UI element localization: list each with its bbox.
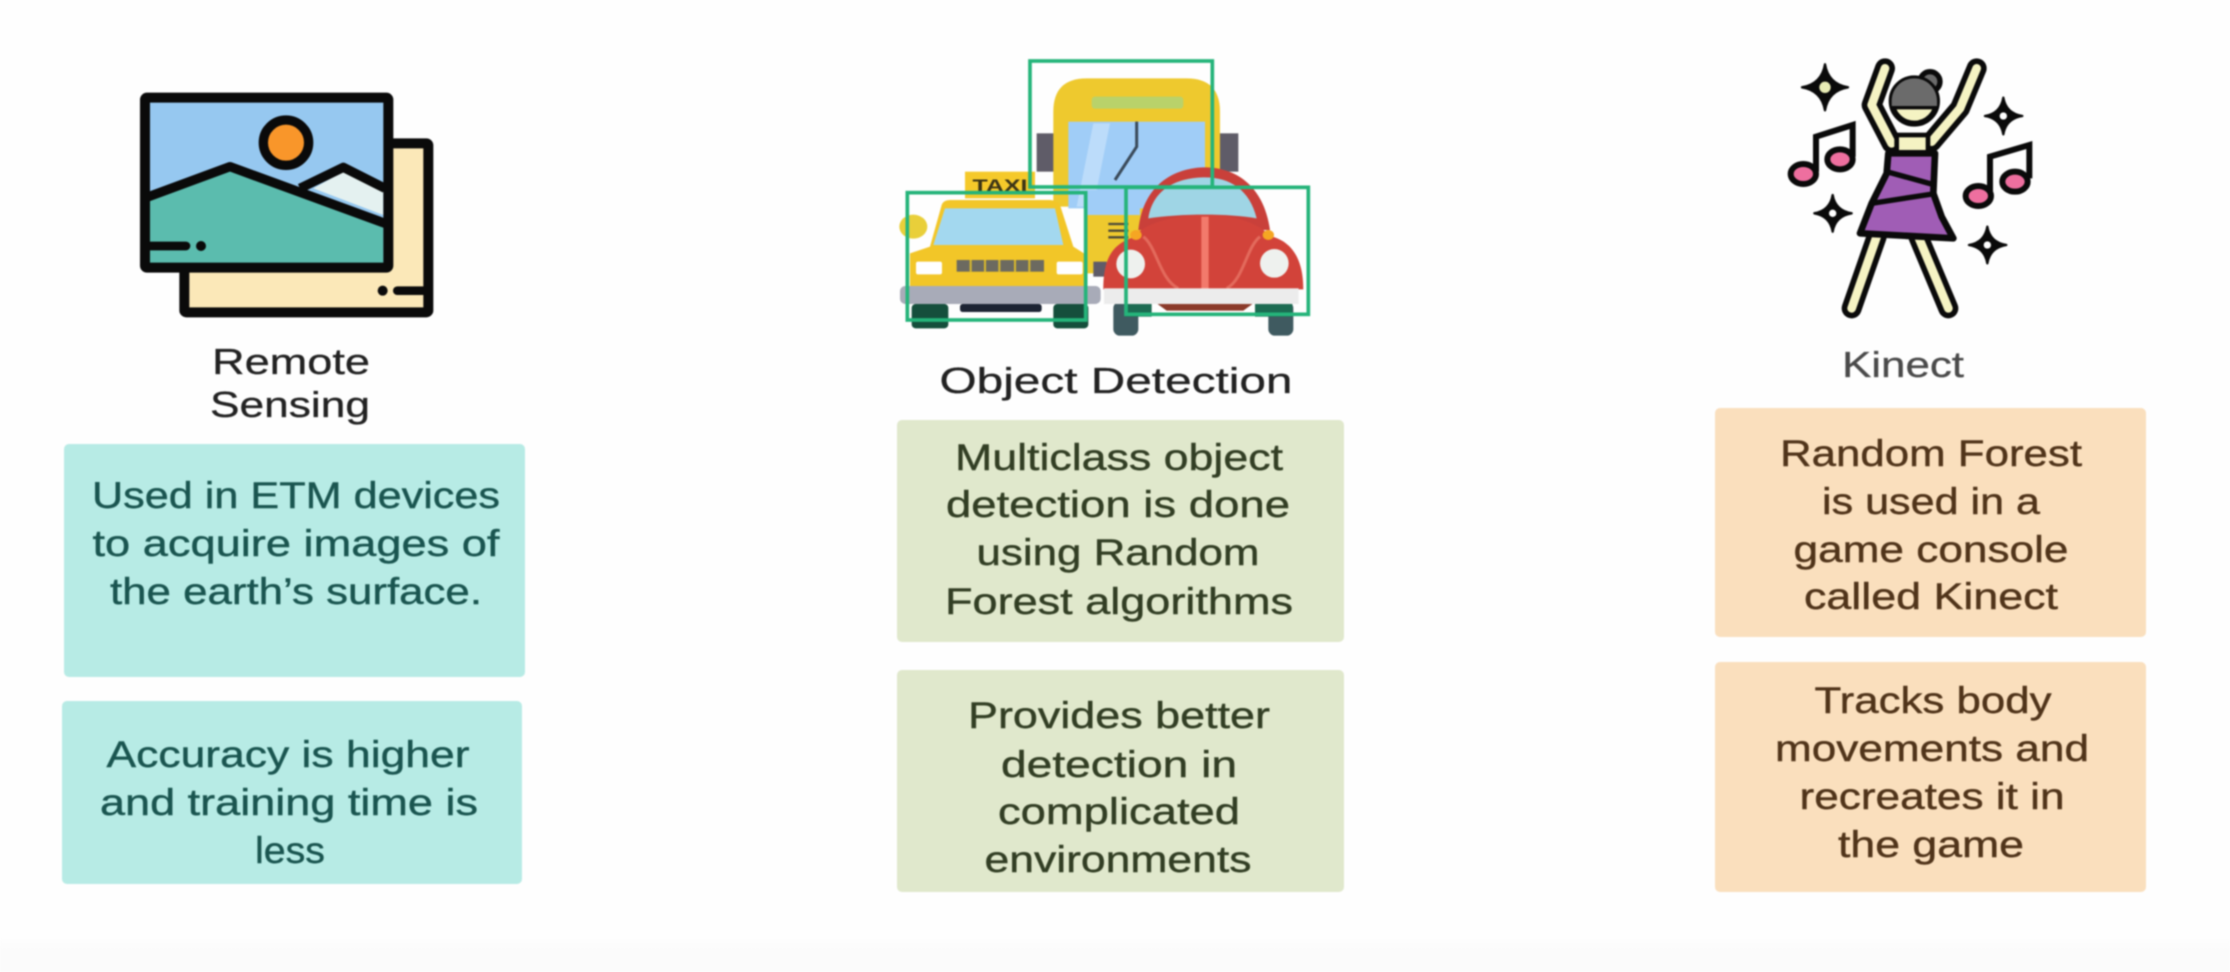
text box: better detection: [897, 670, 1344, 892]
text box: game console: called Kinect: [1804, 576, 2059, 617]
text box: body tracking: [1715, 662, 2146, 892]
text box: better detection: Provides better: [968, 695, 1270, 736]
text box: multiclass detection: detection is done: [946, 484, 1290, 525]
panel: kinect: [1715, 64, 2146, 892]
text box: better detection: complicated: [998, 791, 1240, 832]
text box: body tracking: Tracks body: [1814, 680, 2052, 721]
text box: ETM devices: [64, 444, 525, 677]
text box: multiclass detection: using Random: [976, 532, 1260, 573]
heading: Remote Sensing: Sensing: [210, 384, 370, 425]
panel: remote sensing: [62, 98, 525, 884]
text box: multiclass detection: Forest algorithms: [945, 581, 1293, 622]
text box: game console: game console: [1794, 529, 2068, 570]
text box: body tracking: movements and: [1775, 728, 2089, 769]
text box: ETM devices: to acquire images of: [92, 523, 500, 564]
text box: body tracking: the game: [1838, 824, 2024, 865]
text box: accuracy: and training time is: [100, 782, 478, 823]
text box: better detection: environments: [984, 839, 1252, 880]
icon: stacked landscape photos: [145, 98, 428, 312]
text box: body tracking: recreates it in: [1800, 776, 2064, 817]
text box: ETM devices: Used in ETM devices: [92, 475, 500, 516]
text box: ETM devices: the earth’s surface.: [110, 571, 482, 612]
icon: red beetle car: [1103, 167, 1303, 336]
text box: accuracy: less: [255, 830, 325, 871]
text box: multiclass detection: [897, 420, 1344, 642]
text box: better detection: detection in: [1001, 744, 1237, 785]
text box: accuracy: [62, 701, 522, 884]
text box: game console: [1715, 408, 2146, 637]
heading: Remote Sensing: [210, 341, 370, 425]
icon: vehicles with detection boxes: [899, 61, 1308, 336]
heading: Remote Sensing: Remote: [212, 341, 370, 382]
detection boxes: [907, 61, 1308, 320]
text box: multiclass detection: Multiclass object: [955, 437, 1284, 478]
panel: object detection: [897, 61, 1344, 892]
heading: Kinect: Kinect: [1842, 344, 1964, 385]
text box: game console: Random Forest: [1780, 433, 2083, 474]
text box: game console: is used in a: [1822, 481, 2040, 522]
heading: Object Detection: Object Detection: [940, 360, 1292, 401]
icon: taxi: TAXI: [972, 176, 1027, 196]
icon: bus: [1037, 78, 1238, 277]
icon: taxi: [899, 172, 1101, 328]
icon: dancing figure with notes and sparkles: [1791, 64, 2029, 308]
text box: accuracy: Accuracy is higher: [106, 734, 470, 775]
